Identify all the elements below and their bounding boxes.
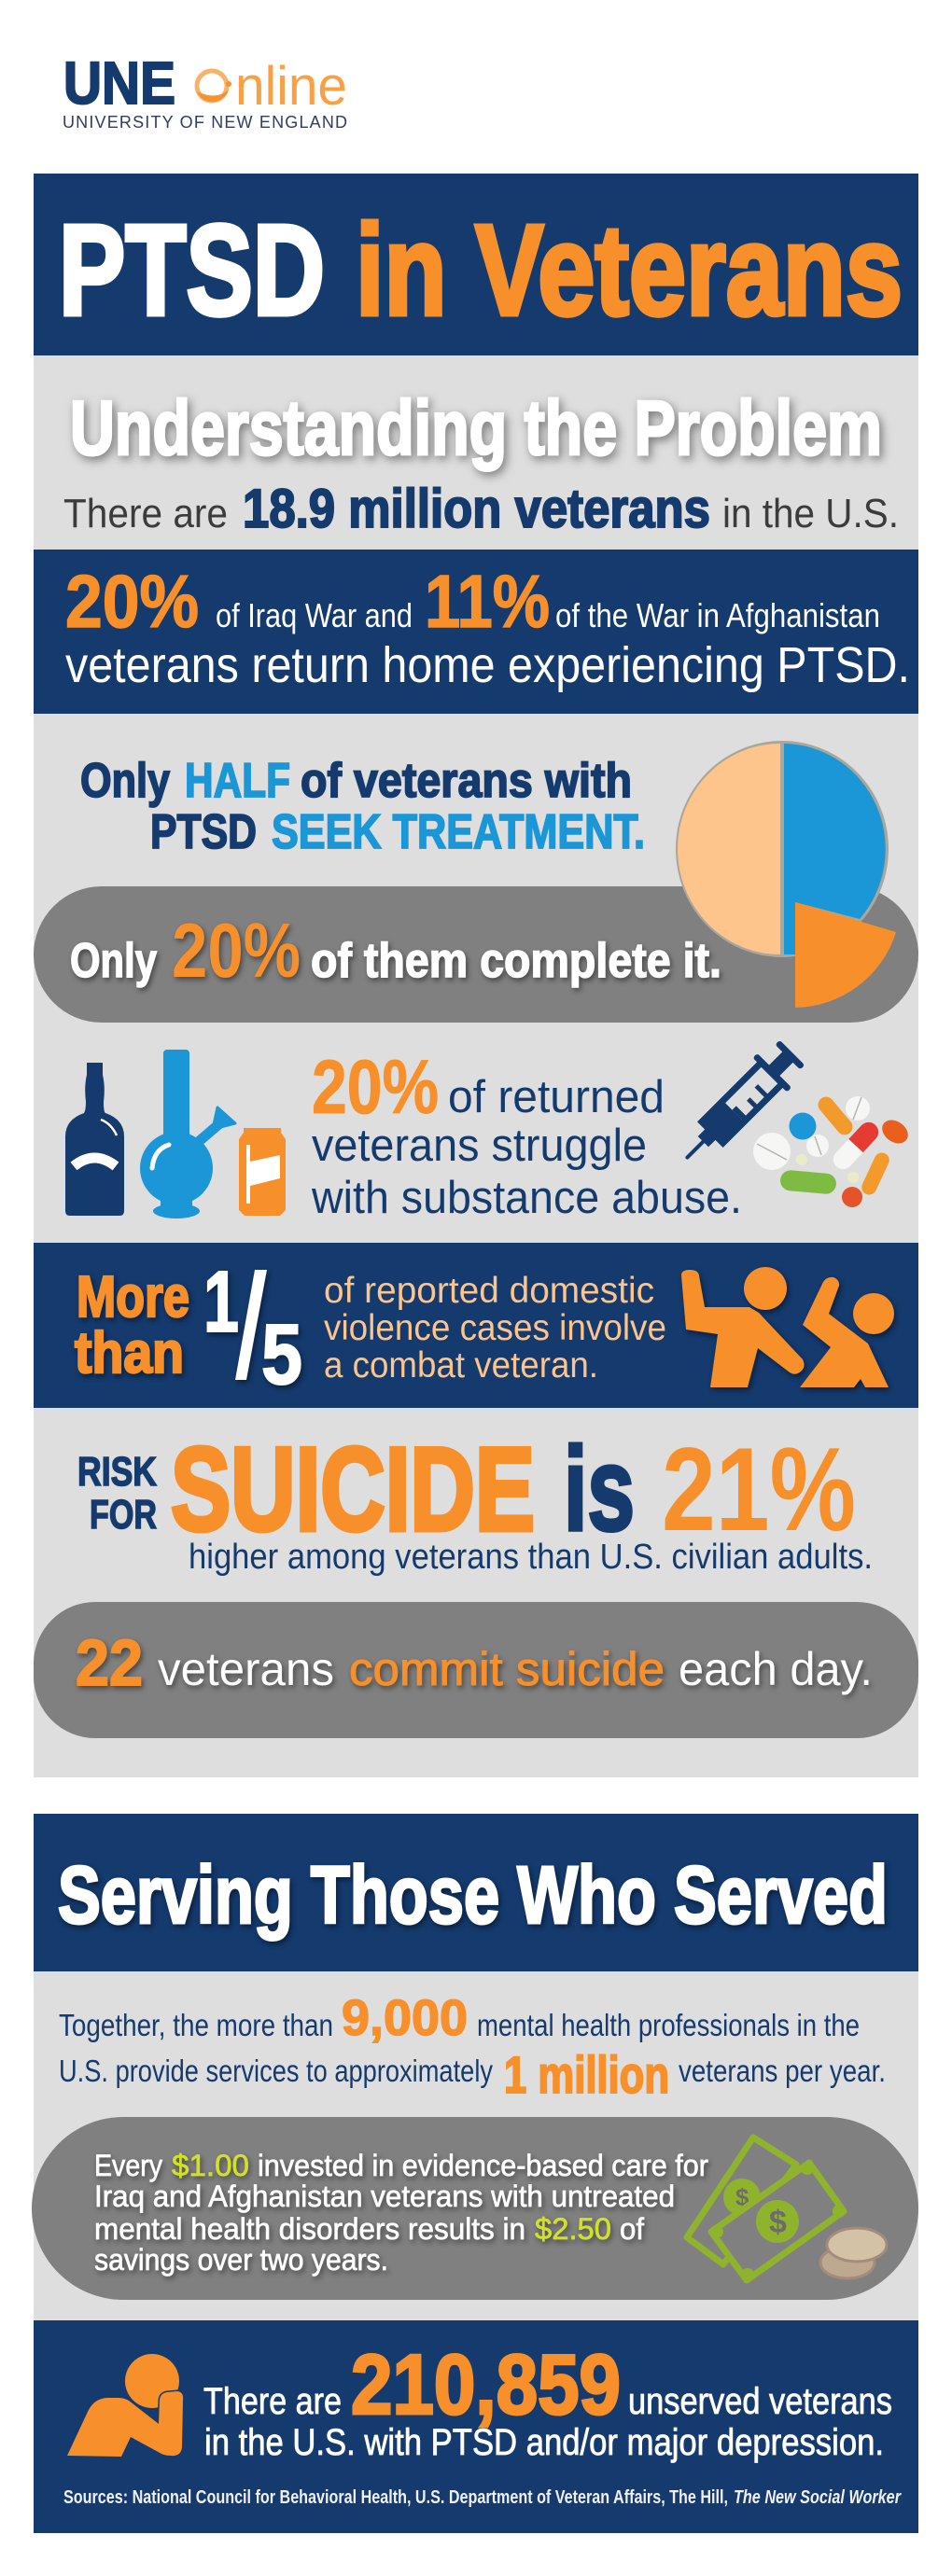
panel: domestic violence band — [34, 1243, 918, 1408]
text: 210,859 unserved veterans: unserved veterans — [628, 2381, 892, 2422]
text: 18.9 million veterans: 18.9 million veterans — [243, 479, 710, 539]
text: risk for suicide: RISK — [77, 1449, 157, 1495]
text: risk for suicide: SUICIDE — [171, 1423, 535, 1555]
pill: savings from evidence-based care: $2.50 — [535, 2212, 611, 2246]
pill: only 20% complete: Only — [70, 934, 157, 988]
fraction: 1/5 — [203, 1253, 302, 1402]
text: sources: The New Social Worker — [734, 2487, 902, 2508]
text: domestic violence: of reported domestic — [324, 1271, 654, 1311]
text: mental health professionals: Together, the more than — [59, 2008, 333, 2042]
panel: 20% and 11% PTSD band: 11% — [425, 560, 550, 643]
text: mental health professionals: 9,000 — [342, 1990, 468, 2046]
pill: 22 veterans each day: each day. — [679, 1643, 873, 1695]
text: only half seek treatment — [80, 754, 645, 859]
text: risk for suicide: is — [564, 1423, 635, 1555]
title — [59, 199, 903, 342]
logo: UNE Online: nline — [235, 56, 347, 117]
logo: UNE Online: UNIVERSITY OF NEW ENGLAND — [63, 113, 347, 132]
text: mental health professionals: mental health professionals in the — [477, 2008, 860, 2042]
fraction: 1/5: 1 — [203, 1253, 239, 1350]
icon: money and coins: $ — [735, 2183, 749, 2211]
text: 20% substance abuse: of returned — [448, 1072, 665, 1122]
pill: savings from evidence-based care: invested in evidence-based care for — [258, 2149, 708, 2182]
icon: beer can — [239, 1128, 286, 1216]
icon: pills — [753, 1093, 913, 1207]
text: 18.9 million veterans — [63, 479, 899, 539]
pill: only 20% complete — [34, 886, 918, 1023]
logo: UNE Online — [63, 49, 347, 132]
text: 210,859 unserved veterans: There are — [203, 2381, 342, 2422]
icon: syringe — [669, 1036, 809, 1176]
logo: UNE Online: UNE — [63, 49, 175, 117]
icon: fighting figures — [681, 1267, 894, 1387]
text: 20% substance abuse: veterans struggle — [312, 1121, 647, 1171]
pill: only 20% complete: 20% — [172, 907, 301, 994]
icon: liquor bottle — [65, 1063, 124, 1216]
text: mental health professionals: veterans per year. — [679, 2054, 886, 2088]
pill: savings from evidence-based care: savings over two years. — [94, 2243, 388, 2277]
text: only half seek treatment: SEEK TREATMENT. — [272, 805, 645, 859]
text: mental health professionals — [59, 1990, 886, 2104]
text: sources: Sources: National Council for Behavioral Health, U.S. Department of Veteran Affairs, The Hill, — [63, 2487, 728, 2508]
pill: 22 veterans each day: 22 — [76, 1626, 143, 1699]
panel: gray background, understanding the problem — [34, 355, 918, 1777]
pill: 22 veterans each day — [34, 1602, 918, 1738]
panel: 20% and 11% PTSD band: 20% — [65, 560, 199, 643]
fraction: 1/5: 5 — [261, 1307, 302, 1402]
text: more than — [75, 1265, 189, 1385]
text: risk for suicide — [77, 1423, 873, 1577]
text: more than: than — [75, 1321, 184, 1385]
text: 20% substance abuse — [311, 1045, 742, 1223]
text: domestic violence — [324, 1271, 666, 1385]
text: only half seek treatment: of veterans with — [301, 754, 632, 808]
pill: savings from evidence-based care: mental health disorders results in — [94, 2212, 525, 2246]
text: mental health professionals: 1 million — [504, 2045, 669, 2104]
text: only half seek treatment: PTSD — [150, 805, 257, 859]
text: only half seek treatment: Only — [80, 754, 170, 808]
icon: bong — [140, 1050, 235, 1218]
panel: 20% and 11% PTSD band — [34, 550, 918, 714]
pill: 22 veterans each day: commit suicide — [349, 1643, 665, 1695]
text: 20% substance abuse: with substance abuse. — [311, 1173, 742, 1223]
panel: title banner — [34, 174, 918, 355]
text: 18.9 million veterans: There are — [63, 491, 228, 536]
pill: savings from evidence-based care: Iraq and Afghanistan veterans with untreated — [94, 2179, 675, 2213]
panel: Serving Those Who Served heading — [34, 1814, 918, 1971]
text: risk for suicide: 21% — [662, 1423, 856, 1555]
text: 20% substance abuse: 20% — [312, 1045, 439, 1130]
text: more than: More — [77, 1265, 189, 1330]
pill: savings from evidence-based care — [32, 2117, 918, 2300]
text: mental health professionals: U.S. provide services to approximately — [59, 2054, 493, 2088]
text: risk for suicide: FOR — [90, 1492, 157, 1538]
text: only half seek treatment: HALF — [185, 754, 290, 808]
pill: savings from evidence-based care: Every — [94, 2149, 162, 2182]
icon: money and coins — [687, 2137, 887, 2281]
panel: 20% and 11% PTSD band: of the War in Afghanistan — [555, 596, 880, 634]
pill: 22 veterans each day: veterans — [158, 1643, 334, 1695]
icon: money and coins: $ — [769, 2205, 787, 2240]
pill: only 20% complete: of them complete it. — [311, 934, 721, 988]
panel: gray background, services — [34, 1971, 918, 2320]
panel: unserved veterans band — [34, 2320, 918, 2533]
title: PTSD — [59, 199, 325, 342]
icon: person with head in hand — [67, 2354, 183, 2457]
pill: savings from evidence-based care: of — [620, 2212, 644, 2246]
text: domestic violence: violence cases involve — [324, 1308, 666, 1348]
text: 210,859 unserved veterans: 210,859 — [351, 2338, 621, 2432]
text: risk for suicide: higher among veterans than U.S. civilian adults. — [189, 1538, 873, 1577]
panel: 20% and 11% PTSD band: of Iraq War and — [216, 596, 413, 634]
pill: savings from evidence-based care: $1.00 — [172, 2149, 249, 2182]
chart: pie of treatment — [676, 741, 896, 1008]
text: 18.9 million veterans: in the U.S. — [722, 491, 899, 536]
text: domestic violence: a combat veteran. — [324, 1345, 598, 1385]
text: 210,859 unserved veterans — [203, 2338, 892, 2463]
